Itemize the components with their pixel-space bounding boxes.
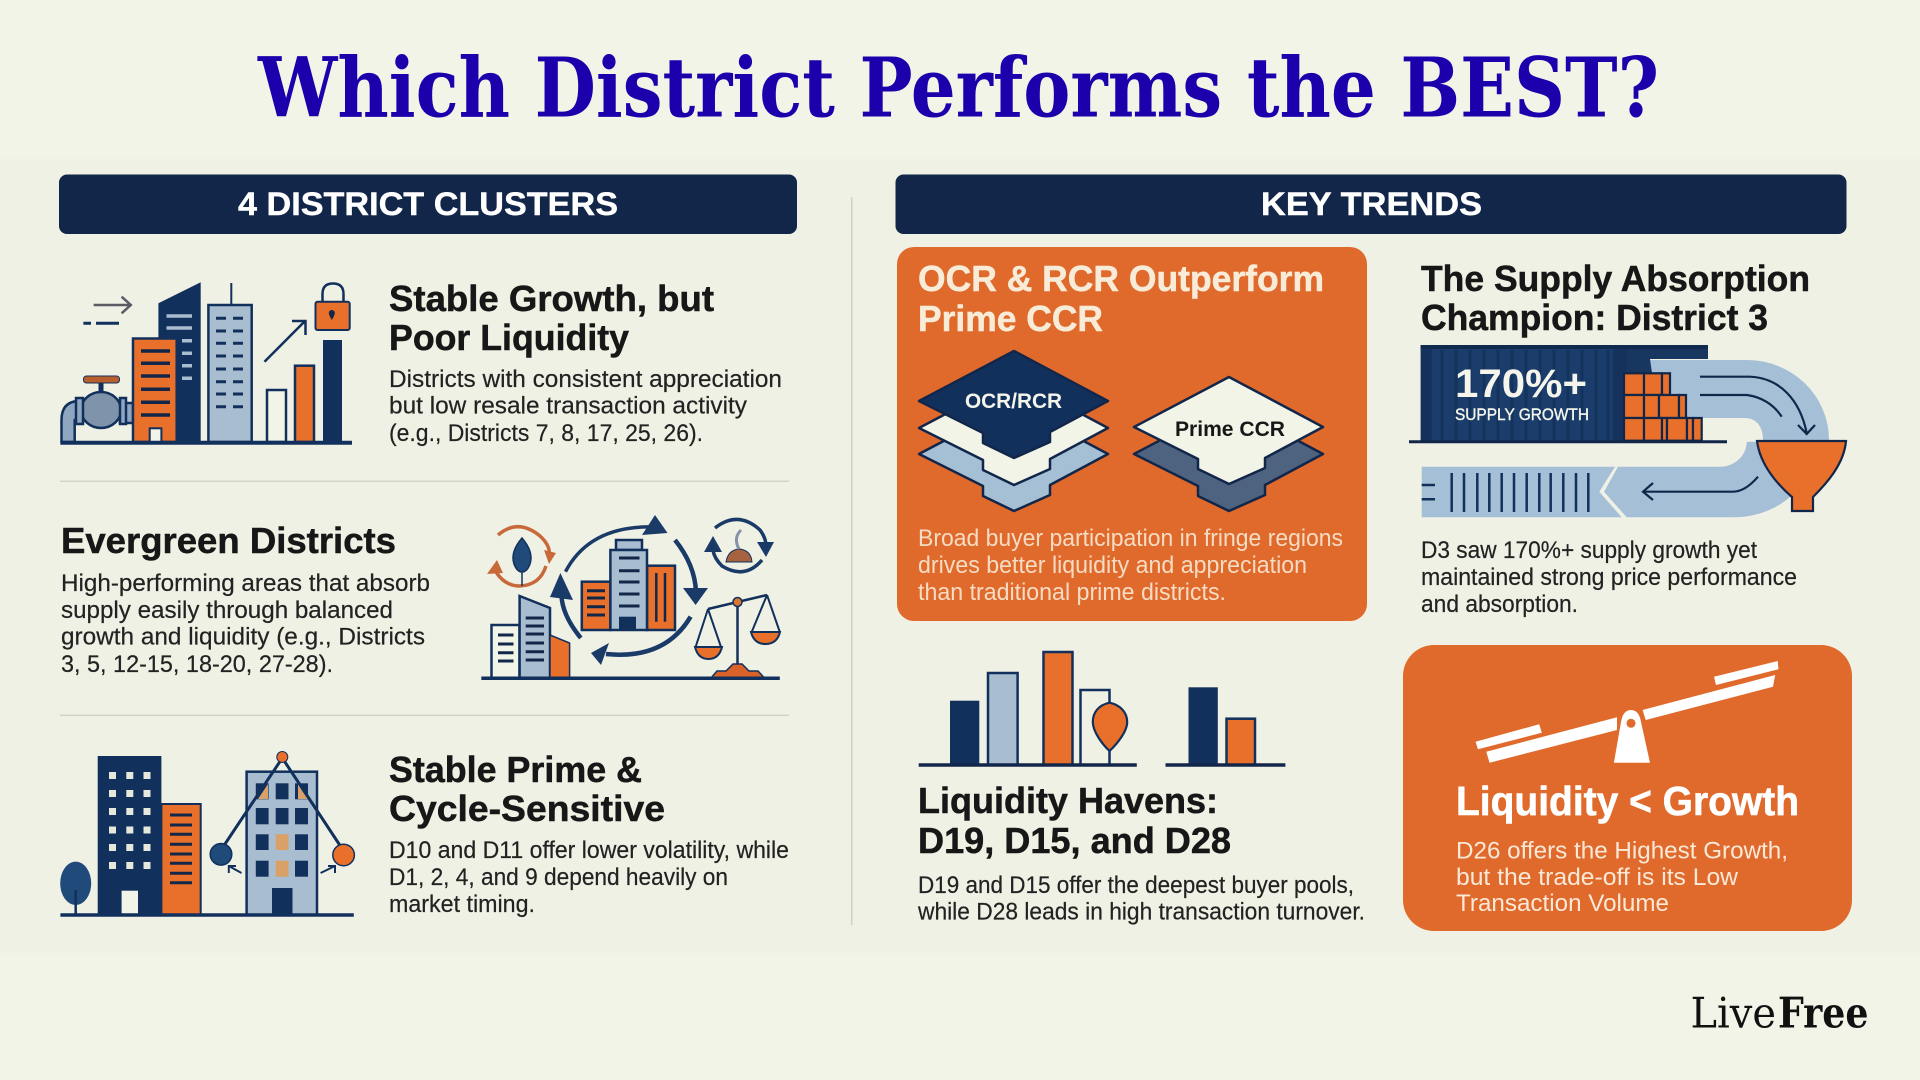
- body text: than traditional prime districts.: [918, 579, 1226, 606]
- body text: High-performing areas that absorb: [61, 570, 430, 597]
- panel: evergreen districts: [61, 515, 780, 678]
- body text: D10 and D11 offer lower volatility, while: [389, 837, 789, 864]
- body text: D3 saw 170%+ supply growth yet: [1421, 537, 1757, 564]
- diagram: OCR/RCR stacked tiers: [919, 351, 1108, 511]
- illustration: container, pipe and funnel: [1409, 345, 1846, 517]
- panel: supply absorption champion: [1409, 258, 1846, 618]
- column divider: [851, 197, 852, 925]
- body text: [61, 570, 430, 678]
- diagram: Prime CCR tiers: [1134, 377, 1323, 511]
- body text: [389, 366, 782, 447]
- body text: [917, 872, 1365, 926]
- body text: maintained strong price performance: [1421, 564, 1797, 591]
- heading: [918, 780, 1231, 861]
- body text: D26 offers the Highest Growth,: [1456, 838, 1788, 864]
- body text: [1456, 838, 1788, 917]
- heading: [389, 749, 665, 829]
- heading: Stable Growth, but: [389, 278, 714, 319]
- header: key trends: KEY TRENDS: [1261, 186, 1482, 222]
- body text: supply easily through balanced: [61, 597, 393, 624]
- heading: Poor Liquidity: [389, 317, 629, 358]
- bar chart with location pin: [919, 652, 1285, 765]
- body text: Transaction Volume: [1456, 890, 1669, 917]
- body text: 3, 5, 12-15, 18-20, 27-28).: [61, 651, 333, 678]
- heading: [389, 278, 714, 358]
- icon: buildings, circular arrows, leaf and scales: [481, 515, 780, 678]
- body text: Districts with consistent appreciation: [389, 366, 782, 393]
- illustration: container, pipe and funnel: 170%+: [1455, 362, 1587, 406]
- header: 4 district clusters: [59, 174, 797, 234]
- heading: Liquidity < Growth: [1456, 778, 1799, 824]
- illustration: container, pipe and funnel: SUPPLY GROWTH: [1455, 405, 1589, 424]
- body text: D1, 2, 4, and 9 depend heavily on: [389, 864, 728, 891]
- logo: LiveFree: [1690, 988, 1868, 1037]
- diagram: Prime CCR tiers: Prime CCR: [1175, 418, 1285, 441]
- header: 4 district clusters: 4 DISTRICT CLUSTERS: [238, 186, 618, 222]
- heading: Champion: District 3: [1421, 297, 1768, 338]
- heading: Stable Prime &: [389, 749, 642, 790]
- body text: drives better liquidity and appreciation: [918, 552, 1307, 579]
- heading: Cycle-Sensitive: [389, 788, 665, 829]
- title: Which District Performs the BEST?: [257, 40, 1659, 136]
- body text: (e.g., Districts 7, 8, 17, 25, 26).: [389, 420, 703, 447]
- body text: [1421, 537, 1797, 618]
- icon: buildings, valve, lock and rising bars: [60, 282, 352, 443]
- panel: OCR and RCR outperform prime CCR: [897, 247, 1367, 621]
- body text: D19 and D15 offer the deepest buyer pools,: [918, 872, 1354, 899]
- heading: Liquidity Havens:: [918, 780, 1218, 821]
- body text: while D28 leads in high transaction turnover.: [917, 898, 1365, 926]
- panel: stable prime and cycle-sensitive: [60, 749, 789, 918]
- heading: [918, 258, 1324, 339]
- body text: but low resale transaction activity: [389, 392, 747, 420]
- body text: [918, 525, 1343, 606]
- body text: market timing.: [389, 891, 535, 918]
- heading: Prime CCR: [918, 298, 1103, 339]
- body text: and absorption.: [1421, 591, 1578, 618]
- header: key trends: [896, 174, 1846, 234]
- body text: Broad buyer participation in fringe regions: [918, 525, 1343, 552]
- heading: OCR & RCR Outperform: [918, 258, 1324, 299]
- panel: liquidity less than growth: [1403, 645, 1852, 931]
- body text: but the trade-off is its Low: [1456, 864, 1739, 891]
- icon: towers and pendulum: [60, 752, 354, 915]
- heading: The Supply Absorption: [1421, 258, 1810, 299]
- heading: [1421, 258, 1810, 338]
- body text: [389, 837, 789, 918]
- panel: liquidity havens: [917, 652, 1365, 926]
- heading: D19, D15, and D28: [918, 820, 1231, 861]
- logo: LiveFree: Free: [1778, 988, 1868, 1037]
- icon: seesaw: [1476, 661, 1778, 763]
- body text: growth and liquidity (e.g., Districts: [61, 624, 425, 650]
- heading: Evergreen Districts: [61, 520, 396, 561]
- panel: stable growth, poor liquidity: [60, 278, 782, 447]
- diagram: OCR/RCR stacked tiers: OCR/RCR: [965, 390, 1062, 413]
- logo: LiveFree: Live: [1690, 988, 1776, 1037]
